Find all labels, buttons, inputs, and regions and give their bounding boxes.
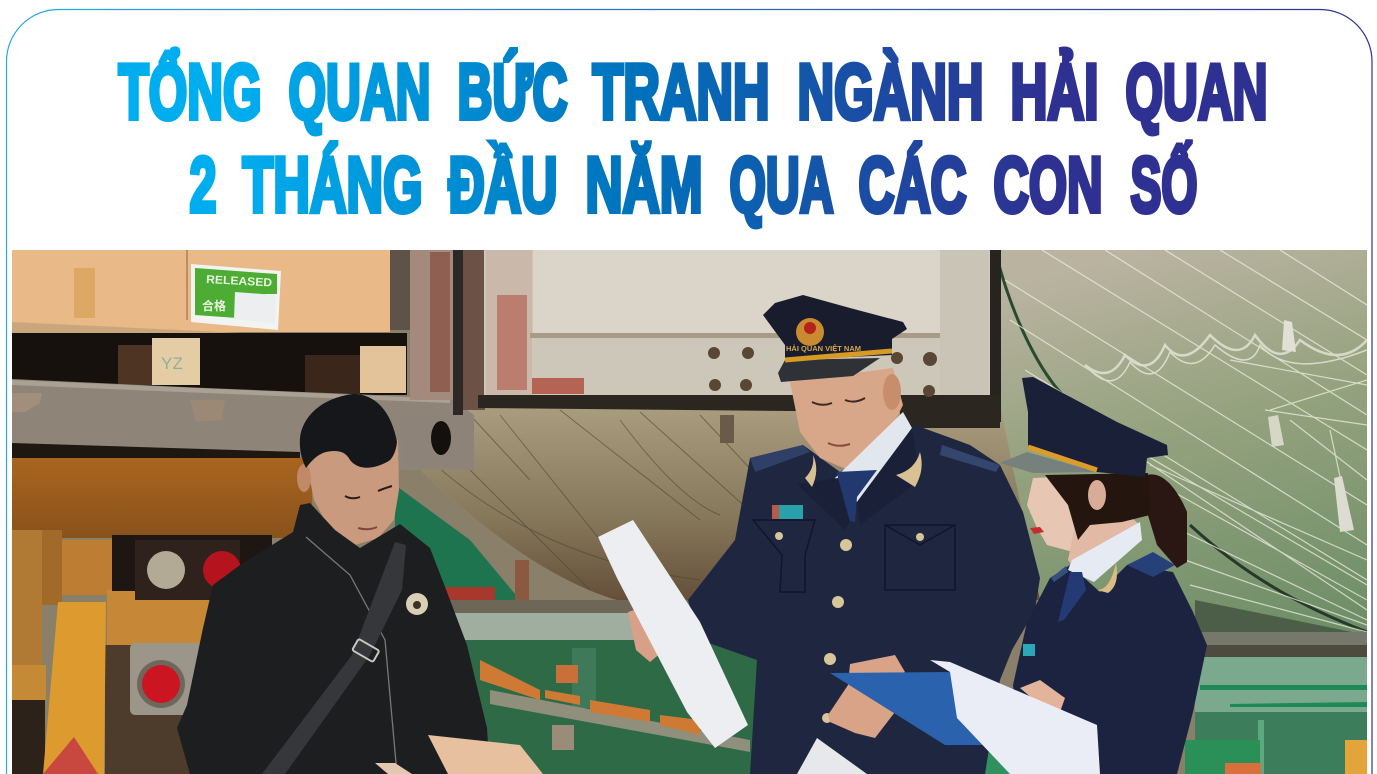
green trailer bed behind officers [395, 485, 1367, 774]
jacket badge [406, 593, 428, 615]
hand [1020, 680, 1065, 712]
photo: customs officers inspecting a truck [12, 250, 1367, 774]
cargo boxes and pallet with sticker [12, 250, 407, 395]
title [118, 48, 1268, 228]
sticker: released: RELEASED [206, 274, 272, 289]
title: 2 [190, 140, 216, 228]
collar insignia [805, 455, 816, 487]
truck rear frame with lights [12, 458, 312, 774]
shirt and tie [1068, 522, 1142, 582]
shirt and tie [835, 412, 912, 502]
title: SỐ [1130, 140, 1198, 228]
container rear door [478, 250, 1001, 443]
text: YZ mark: YZ [161, 354, 183, 373]
cap [763, 295, 907, 382]
cap: HẢI QUAN VIỆT NAM [786, 344, 861, 353]
cap [1000, 377, 1168, 477]
blue clipboard and papers [797, 660, 1100, 774]
bag strap [262, 542, 406, 774]
sticker: released [191, 264, 281, 330]
person: man in black jacket [177, 394, 543, 774]
title: QUAN [1126, 48, 1268, 136]
sticker: released: 合格 [202, 298, 226, 313]
title: QUA [730, 140, 834, 228]
white box held by officer [598, 520, 748, 748]
title: NĂM [586, 140, 702, 228]
pockets and buttons [753, 520, 955, 592]
container beam and door post [12, 250, 485, 470]
title: BỨC [458, 48, 568, 136]
person: female customs officer [1000, 377, 1207, 774]
title: CON [994, 140, 1102, 228]
title: TỔNG [118, 48, 262, 136]
title: CÁC [858, 140, 966, 228]
title: TRANH [592, 48, 770, 136]
covered cargo tarpaulin with net [400, 250, 1367, 642]
title: THÁNG [242, 140, 422, 228]
title: QUAN [288, 48, 430, 136]
documents held by man [428, 735, 543, 774]
title: HẢI [1010, 48, 1098, 136]
title: NGÀNH [798, 48, 984, 136]
person: male customs officer [628, 295, 1040, 774]
hands [628, 610, 658, 662]
title: ĐẦU [448, 140, 558, 228]
name badge [779, 505, 803, 519]
